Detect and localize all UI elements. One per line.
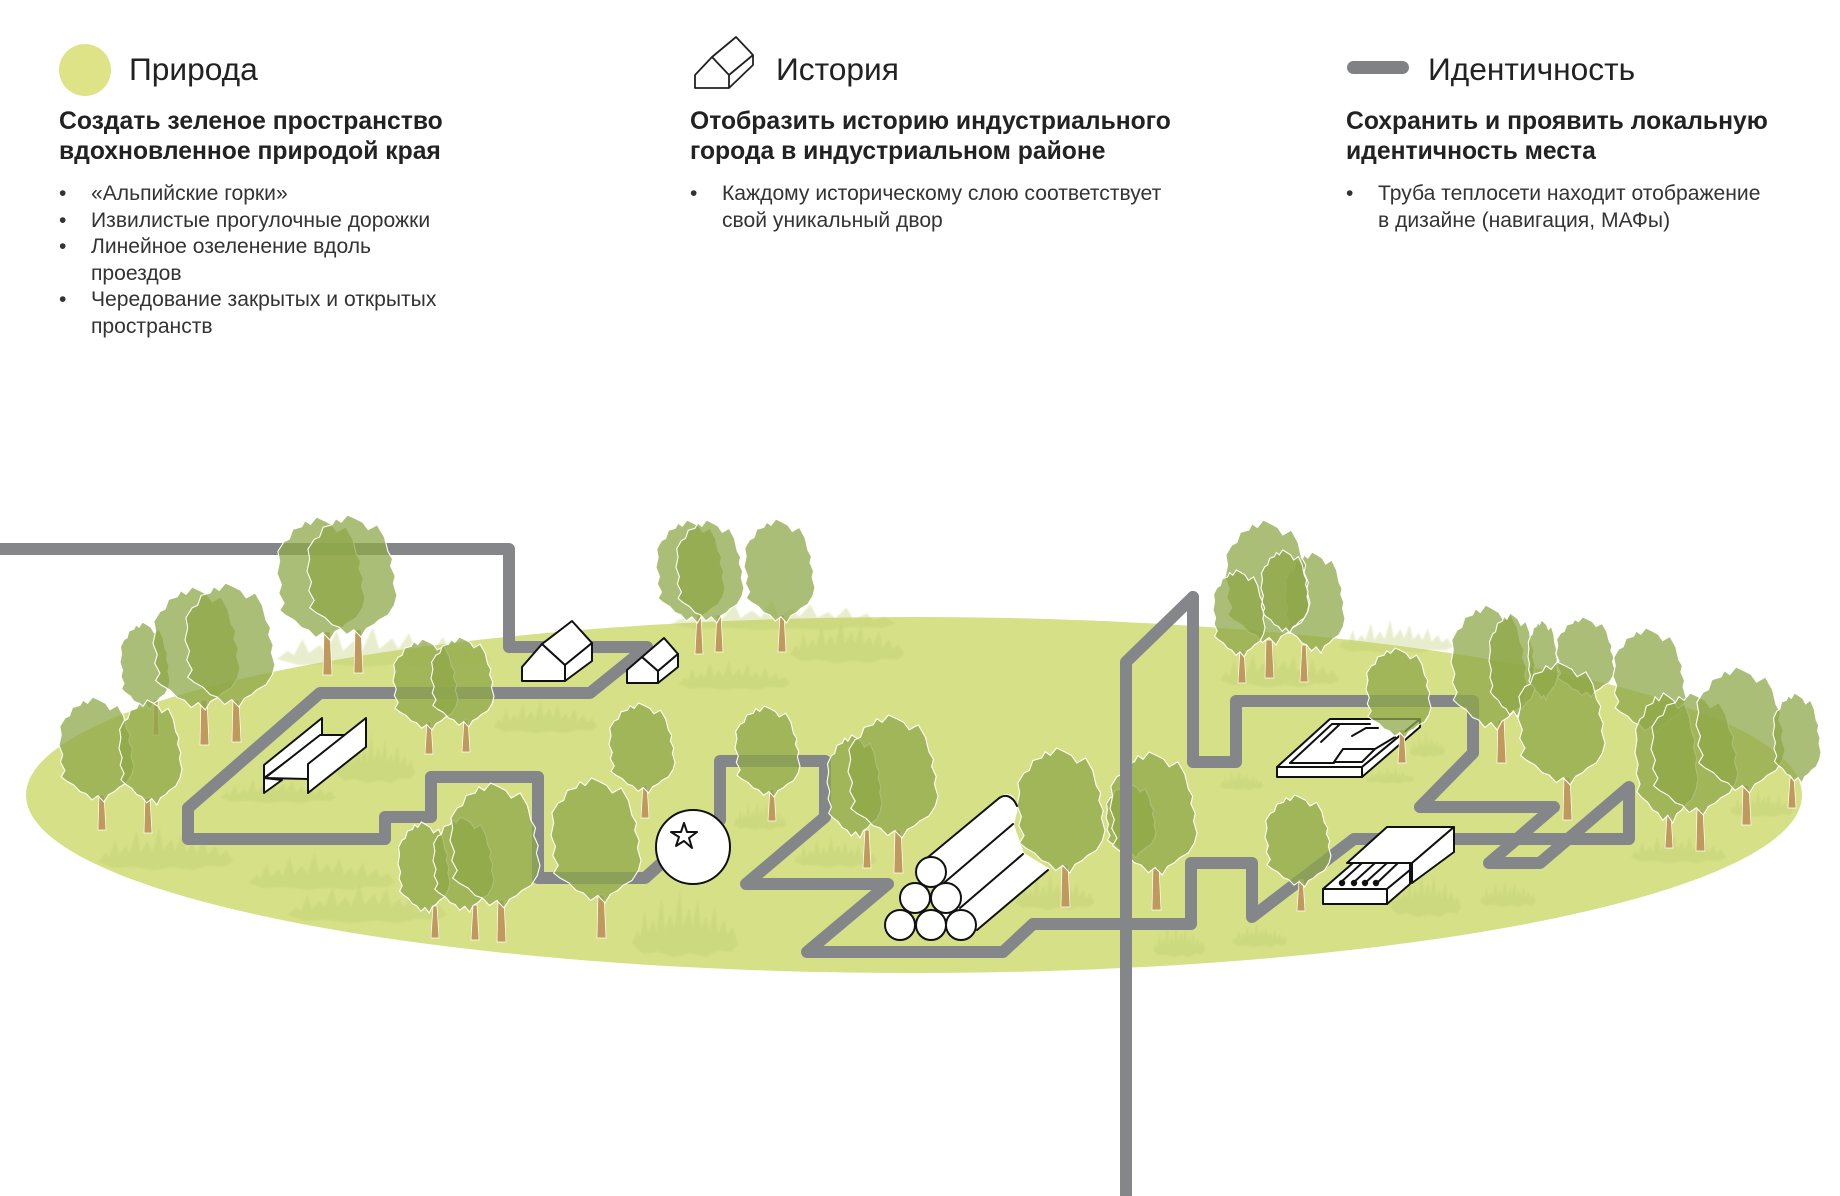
subheading: identity: идентичность места	[1346, 138, 1596, 165]
icon: stacked logs	[885, 794, 1050, 940]
icon: house outline	[694, 36, 754, 89]
bullet list: nature: «Альпийские горки»	[91, 182, 288, 205]
trees: upper right group	[1213, 520, 1345, 683]
bullet list: nature: пространств	[91, 314, 213, 338]
icon: bench	[264, 718, 366, 793]
subheading: nature: Создать зеленое пространство	[59, 108, 443, 135]
vertical pipe	[1126, 597, 1193, 1196]
trees: lower left cluster	[398, 783, 540, 942]
tree: behind logs	[1017, 748, 1105, 907]
trees: pair crossing path	[393, 637, 494, 754]
subheading: identity: Сохранить и проявить локальную	[1346, 108, 1768, 135]
bullet list: nature: проездов	[91, 262, 182, 284]
subheading: nature	[59, 108, 443, 165]
heading: history: История	[776, 51, 899, 87]
subheading: nature: вдохновленное природой края	[59, 138, 441, 165]
heading: nature: Природа	[129, 51, 258, 87]
trees: left cluster	[59, 583, 275, 833]
panel: history	[690, 36, 1171, 232]
subheading: identity	[1346, 108, 1768, 165]
bullet list: identity	[1346, 182, 1760, 232]
bullet list: identity: Труба теплосети находит отображение	[1378, 182, 1760, 205]
icon: block model with courtyard	[1277, 719, 1420, 777]
icon: pipe segment	[1347, 61, 1409, 74]
heat pipe route	[0, 549, 1629, 952]
trees: beside vertical pipe	[1106, 752, 1197, 910]
bullet list: history	[690, 182, 1161, 232]
bullet list: history: Каждому историческому слою соответствует	[722, 182, 1161, 205]
icon: small house	[627, 638, 678, 683]
trees: right cluster	[1451, 605, 1821, 851]
tree: above ball	[609, 703, 675, 818]
trees: centre pair	[827, 715, 938, 873]
subheading: history: Отобразить историю индустриального	[690, 108, 1171, 135]
bullet list: nature	[60, 182, 436, 338]
tree: over block model	[1366, 648, 1431, 763]
grass tufts	[99, 600, 1793, 957]
icon: green circle	[59, 44, 111, 96]
heading: identity: Идентичность	[1428, 51, 1635, 87]
panel: identity	[1346, 51, 1768, 232]
bullet list: nature: Чередование закрытых и открытых	[91, 288, 436, 311]
tree: lower right	[1265, 795, 1331, 911]
trees: top centre group	[656, 519, 815, 654]
bullet list: identity: в дизайне (навигация, МАФы)	[1378, 208, 1670, 232]
trees: top pair left	[277, 515, 397, 675]
icon: sliding box model	[1323, 827, 1454, 904]
tree: inside path loop	[735, 706, 800, 821]
icon: large house	[522, 621, 592, 681]
panel: nature	[59, 44, 443, 338]
ground ellipse	[26, 617, 1802, 973]
tree: lower centre left	[551, 778, 641, 938]
bullet list: nature: Линейное озеленение вдоль	[91, 235, 371, 258]
bullet list: nature: Извилистые прогулочные дорожки	[91, 208, 430, 232]
icon: ball with star	[656, 810, 730, 884]
subheading: history: города в индустриальном районе	[690, 138, 1106, 165]
bullet list: history: свой уникальный двор	[722, 208, 943, 232]
subheading: history	[690, 108, 1171, 165]
